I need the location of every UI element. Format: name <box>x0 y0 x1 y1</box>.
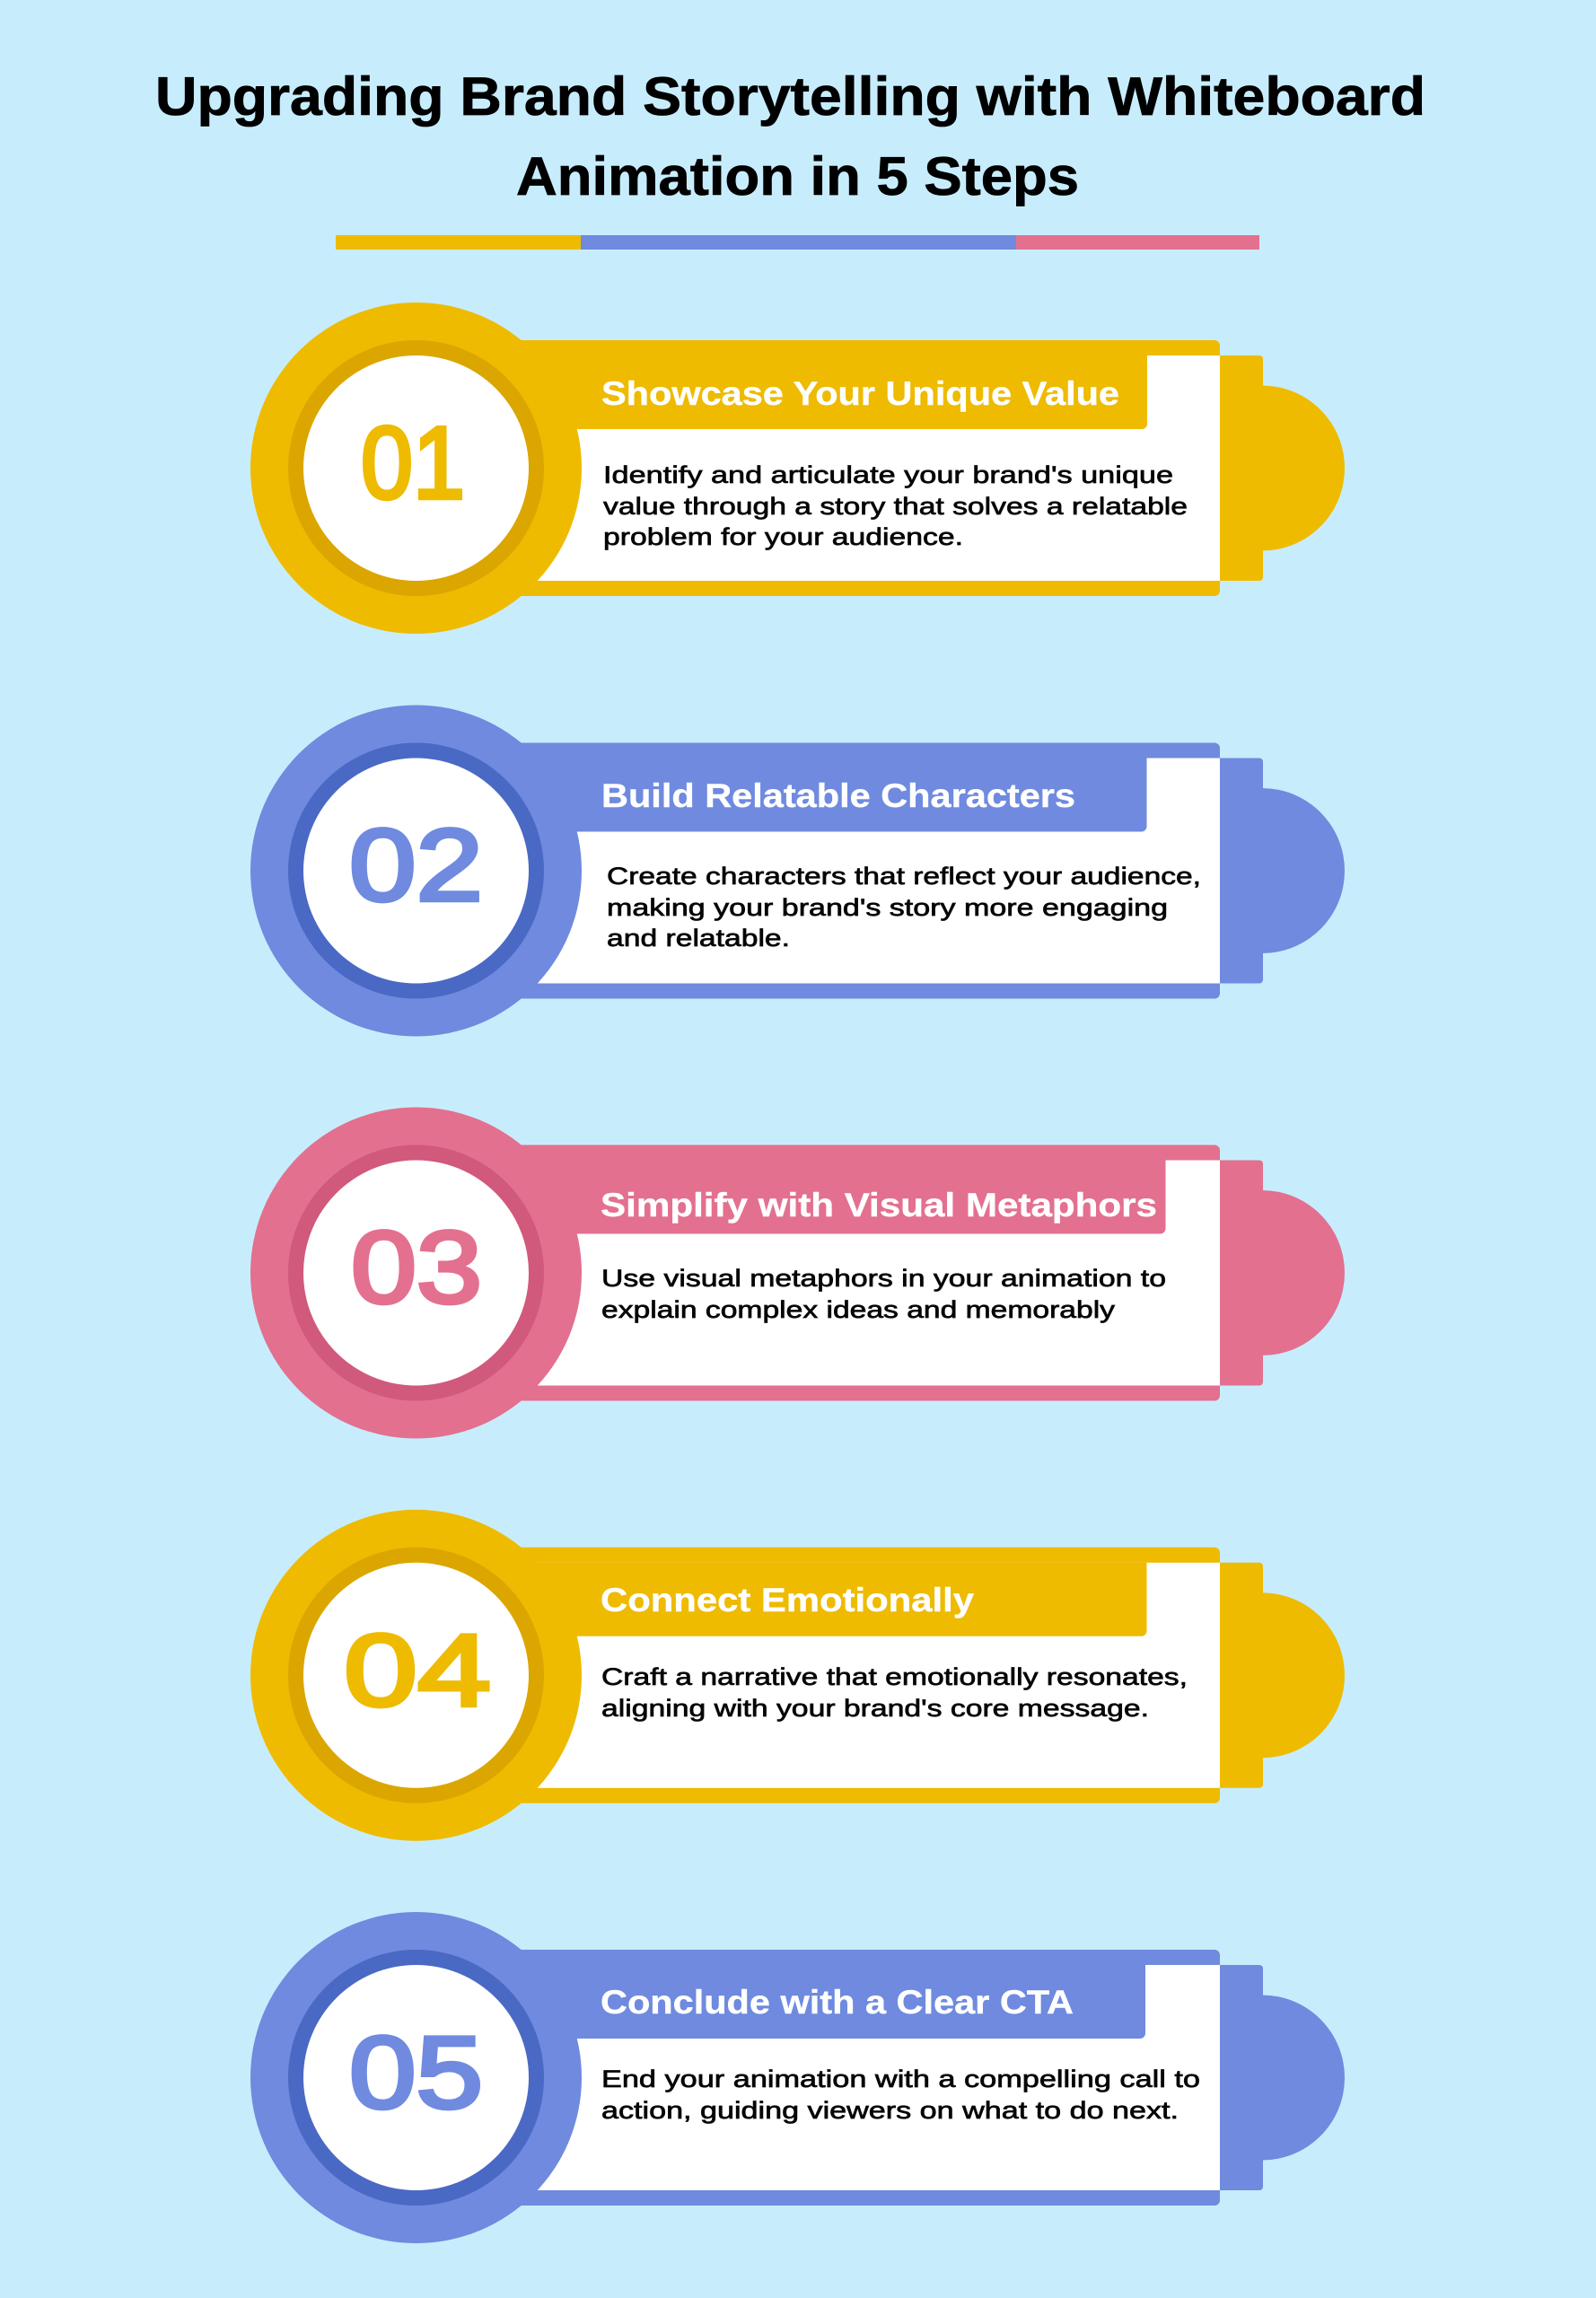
step 3 body text <box>601 1264 1166 1323</box>
step 1 body text <box>603 460 1188 550</box>
step 5 body text <box>601 2065 1200 2124</box>
step 4 number: 04 <box>344 1614 491 1728</box>
step 5 body text: End your animation with a compelling call to <box>601 2065 1200 2092</box>
step 5 body text: action, guiding viewers on what to do next. <box>601 2096 1179 2124</box>
step 4 body text: Craft a narrative that emotionally resonates, <box>601 1662 1188 1690</box>
step 2 panel: Build Relatable Characters <box>250 706 1345 1036</box>
step 2 body text: Create characters that reflect your audience, <box>607 862 1201 890</box>
step 1 body text: value through a story that solves a relatable <box>603 492 1188 520</box>
step 5 heading: Conclude with a Clear CTA <box>601 1983 1074 2021</box>
step 2 card shape <box>250 706 1345 1036</box>
step 2 heading: Build Relatable Characters <box>601 776 1075 814</box>
step 1 number: 01 <box>361 407 465 521</box>
title <box>155 66 1425 206</box>
step 3 body text: Use visual metaphors in your animation to <box>601 1264 1166 1292</box>
step 4 panel: Connect Emotionally <box>250 1510 1345 1841</box>
step 1 body text: problem for your audience. <box>603 522 963 550</box>
step 3 body text: explain complex ideas and memorably <box>601 1295 1115 1323</box>
step 3 number: 03 <box>351 1211 482 1325</box>
step 2 body text <box>607 862 1201 952</box>
title: Animation in 5 Steps <box>516 145 1079 206</box>
step 2 body text: making your brand's story more engaging <box>607 893 1168 921</box>
step 2 body text: and relatable. <box>607 924 790 952</box>
step 4 card shape <box>250 1510 1345 1841</box>
step 4 body text: aligning with your brand's core message. <box>601 1694 1149 1722</box>
step 2 number: 02 <box>349 809 483 923</box>
step 1 card shape <box>250 303 1345 634</box>
step 3 card shape <box>250 1108 1345 1438</box>
step 5 card shape <box>250 1912 1345 2243</box>
title underline: three colour bar <box>336 235 1259 250</box>
step 1 heading: Showcase Your Unique Value <box>601 374 1119 412</box>
step 3 panel: Simplify with Visual Metaphors <box>250 1108 1345 1438</box>
step 5 number: 05 <box>349 2016 483 2130</box>
step 4 heading: Connect Emotionally <box>601 1581 974 1618</box>
step 3 heading: Simplify with Visual Metaphors <box>601 1186 1157 1224</box>
step 4 body text <box>601 1662 1188 1722</box>
step 1 body text: Identify and articulate your brand's unique <box>603 460 1173 488</box>
step 1 panel: Showcase Your Unique Value <box>250 303 1345 634</box>
step 5 panel: Conclude with a Clear CTA <box>250 1912 1345 2243</box>
title: Upgrading Brand Storytelling with Whiteboard <box>155 66 1425 127</box>
